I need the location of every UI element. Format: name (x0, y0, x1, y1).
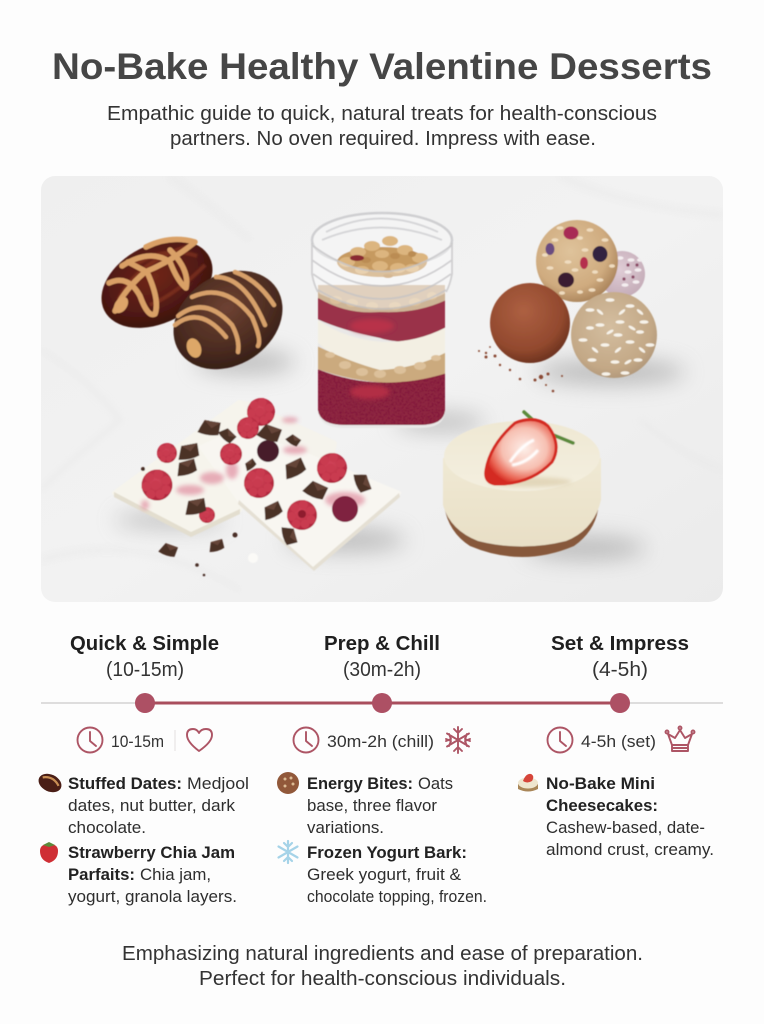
list item: mini cheesecakes: almond crust, creamy. (546, 841, 714, 859)
icon: parfait jar (312, 213, 452, 430)
icon: clock (294, 728, 318, 752)
icon: stuffed date (100, 236, 214, 329)
title: No-Bake Healthy Valentine Desserts (52, 46, 712, 87)
list item: mini cheesecakes: No-Bake Mini (546, 775, 655, 793)
heading: set and impress: (4-5h) (592, 659, 648, 681)
icon: crown (666, 726, 694, 751)
time row: 4-5h (548, 726, 694, 752)
timeline stop 1 (135, 693, 155, 713)
list item: stuffed dates (36, 770, 249, 837)
time row: 4-5h: 4-5h (set) (581, 733, 656, 751)
jar rim and glass neck (312, 213, 452, 267)
heading: prep and chill: Prep & Chill (324, 633, 440, 655)
list item: stuffed dates: dates, nut butter, dark (68, 797, 236, 815)
heading: quick and simple: (10-15m) (106, 659, 184, 681)
time row: 10-15m: 10-15m (111, 733, 164, 751)
icon: clock (78, 728, 102, 752)
list item: strawberry parfaits: Strawberry Chia Jam (68, 844, 235, 862)
time row: 10-15m (78, 728, 212, 752)
cocoa dust (478, 346, 563, 392)
icon: mini date (36, 770, 64, 796)
list item: mini cheesecakes (518, 774, 714, 859)
raspberries (142, 470, 172, 500)
list item: frozen yogurt bark: chocolate topping, frozen. (307, 888, 487, 906)
time row: 30m-2h (294, 727, 470, 753)
icon: heart (187, 729, 212, 751)
panel: dessert photo (41, 176, 723, 602)
list item: frozen yogurt bark: Greek yogurt, fruit & (307, 866, 461, 884)
list item: strawberry parfaits (40, 842, 237, 906)
heading: quick and simple (70, 633, 219, 681)
icon: mini strawberry (40, 842, 58, 863)
timeline stop 3 (610, 693, 630, 713)
shadows (115, 350, 685, 560)
icon: mini cheesecake (518, 774, 538, 792)
list item: strawberry parfaits: yogurt, granola layers. (68, 888, 237, 906)
subtitle: partners. No oven required. Impress with ease. (170, 128, 596, 150)
icon: chocolate date (172, 269, 284, 370)
footer note (122, 943, 643, 990)
list item: stuffed dates: Stuffed Dates: (68, 775, 182, 793)
list item: energy bites: variations. (307, 819, 384, 837)
icon: yogurt bark (114, 398, 400, 576)
icon: energy bites (478, 220, 657, 392)
list item: energy bites: Energy Bites: (307, 775, 413, 793)
list item: energy bites: base, three flavor (307, 797, 438, 815)
icon: clock (548, 728, 572, 752)
heading: prep and chill: (30m-2h) (343, 659, 421, 681)
heading: set and impress: Set & Impress (551, 633, 689, 655)
pink smears (141, 417, 365, 510)
list item: frozen yogurt bark (278, 841, 487, 906)
icon: snowflake (446, 727, 470, 753)
timeline (41, 693, 723, 713)
icon: mini cheesecake (443, 412, 601, 557)
footer note: Emphasizing natural ingredients and ease of preparation. (122, 943, 643, 965)
list item: energy bites: Oats (418, 775, 453, 793)
chocolate chunks (197, 420, 221, 436)
heading: quick and simple: Quick & Simple (70, 633, 219, 655)
icon: blue snowflake (278, 841, 298, 863)
list item: mini cheesecakes: Cashew-based, date- (546, 819, 705, 837)
list item: strawberry parfaits: Chia jam, (140, 866, 211, 884)
list item: stuffed dates: Medjool (187, 775, 249, 793)
heading: set and impress (551, 633, 689, 681)
timeline stop 2 (372, 693, 392, 713)
list item: strawberry parfaits: Parfaits: (68, 866, 135, 884)
list item: mini cheesecakes: Cheesecakes: (546, 797, 658, 815)
list item: energy bites (277, 772, 453, 837)
list item: stuffed dates: chocolate. (68, 819, 146, 837)
subtitle: Empathic guide to quick, natural treats for health-conscious (107, 103, 657, 125)
heading: prep and chill (324, 633, 440, 681)
footer note: Perfect for health-conscious individuals. (199, 968, 566, 990)
time row: 30m-2h: 30m-2h (chill) (327, 733, 434, 751)
list item: frozen yogurt bark: Frozen Yogurt Bark: (307, 844, 467, 862)
subtitle (107, 103, 657, 150)
icon: mini energy bite (277, 772, 299, 794)
